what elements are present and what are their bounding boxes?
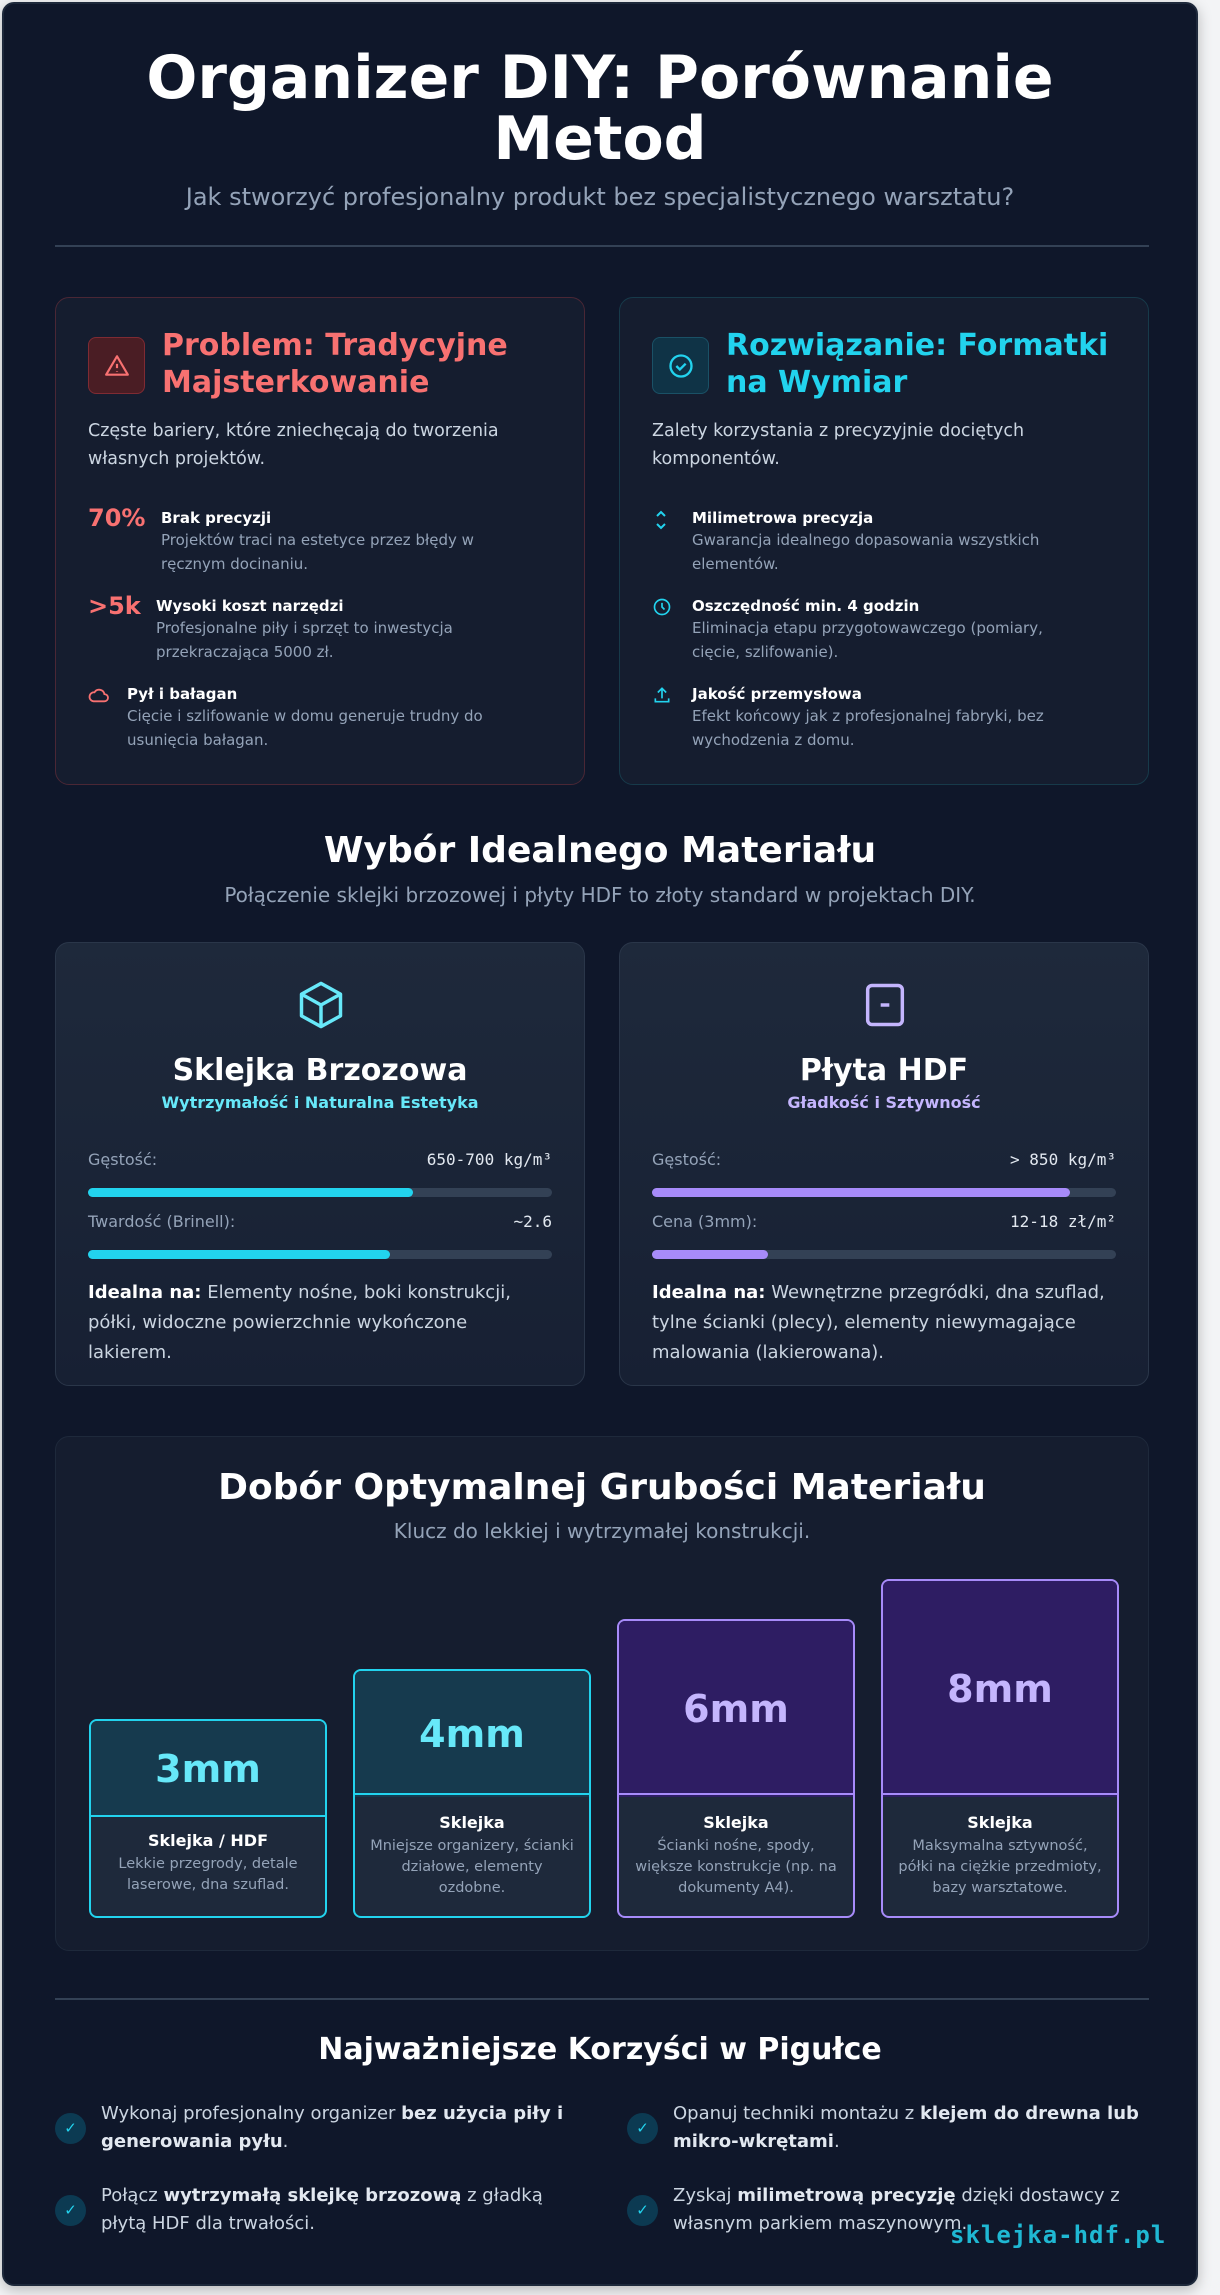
item: >5k: Wysoki koszt narzędzi (156, 597, 344, 615)
ideal use: Idealna na: Elementy nośne, boki konstrukcji, (88, 1282, 511, 1303)
box: 4mm: 4mm (419, 1712, 525, 1756)
ideal use (652, 1282, 1105, 1363)
main card: ✓ (64, 2119, 77, 2137)
icon: warning (88, 337, 145, 394)
icon: panel (866, 984, 904, 1026)
ideal use: tylne ścianki (plecy), elementy niewymagające (652, 1312, 1076, 1333)
stat: hardness: ~2.6 (513, 1212, 552, 1231)
stat: density: Gęstość: (652, 1150, 721, 1169)
stat: hardness (88, 1212, 552, 1231)
item: quality (654, 685, 1044, 749)
stat: hardness: Twardość (Brinell): (88, 1212, 235, 1231)
description: Zalety korzystania z precyzyjnie dociętych komponentów. (652, 421, 1024, 469)
section heading: materials: Wybór Idealnego Materiału (324, 830, 876, 871)
main card: ✓ (636, 2201, 649, 2219)
item: quality: Jakość przemysłowa (692, 685, 862, 703)
box: 8mm: Maksymalna sztywność, półki na ciężkie przedmioty, bazy warsztatowe. (898, 1838, 1102, 1896)
ideal use: malowania (lakierowana). (652, 1342, 884, 1363)
item: dust (88, 685, 483, 749)
stat: density (652, 1150, 1116, 1169)
box: 3mm: Sklejka / HDF (148, 1831, 268, 1850)
item: 70%: 70% (88, 504, 145, 532)
icon: check circle (652, 337, 709, 394)
item: precision: Gwarancja idealnego dopasowania wszystkich elementów. (692, 531, 1039, 573)
benefit 3: Połącz wytrzymałą sklejkę brzozową z gładką płytą HDF dla trwałości. (101, 2185, 543, 2234)
item: >5k: Profesjonalne piły i sprzęt to inwestycja przekraczająca 5000 zł. (156, 619, 453, 661)
benefit 4: Zyskaj milimetrową precyzję dzięki dostawcy z własnym parkiem maszynowym. (673, 2185, 1120, 2234)
ideal use: lakierem. (88, 1342, 172, 1363)
item: quality: Efekt końcowy jak z profesjonalnej fabryki, bez wychodzenia z domu. (692, 707, 1044, 749)
item: time (654, 597, 1043, 661)
box: 3mm: Lekkie przegrody, detale laserowe, dna szuflad. (118, 1856, 298, 1893)
panel: hdf (619, 942, 1149, 1386)
item: 70%: Projektów traci na estetyce przez błędy w ręcznym docinaniu. (161, 531, 474, 573)
box: 3mm: 3mm (155, 1747, 261, 1791)
ideal use: półki, widoczne powierzchnie wykończone (88, 1312, 467, 1333)
main card: ✓ (636, 2119, 649, 2137)
tagline: Wytrzymałość i Naturalna Estetyka (161, 1093, 478, 1112)
box: 6mm: Sklejka (703, 1813, 769, 1832)
item: dust: Cięcie i szlifowanie w domu generuje trudny do usunięcia bałagan. (127, 707, 483, 749)
stat: density: > 850 kg/m³ (1010, 1150, 1116, 1169)
box: 8mm (881, 1579, 1119, 1918)
heading: Rozwiązanie: Formatki (726, 328, 1108, 363)
panel: sklejka (55, 942, 585, 1386)
item: time: Oszczędność min. 4 godzin (692, 597, 919, 615)
item: time: Eliminacja etapu przygotowawczego (pomiary, cięcie, szlifowanie). (692, 619, 1043, 661)
heading (162, 328, 508, 400)
item: >5k (88, 592, 453, 661)
section subtitle: Połączenie sklejki brzozowej i płyty HDF to złoty standard w projektach DIY. (224, 883, 976, 907)
box: 6mm (617, 1619, 855, 1918)
item: precision (656, 509, 1039, 573)
stat: price (652, 1212, 1116, 1231)
box: 4mm: Sklejka (439, 1813, 505, 1832)
ideal use (88, 1282, 511, 1363)
heading: na Wymiar (726, 365, 907, 400)
heading: Dobór Optymalnej Grubości Materiału (218, 1467, 986, 1508)
item: precision: Milimetrowa precyzja (692, 509, 873, 527)
panel: solution (619, 297, 1149, 785)
stat: price: 12-18 zł/m² (1010, 1212, 1116, 1231)
item: 70%: Brak precyzji (161, 509, 271, 527)
tagline: Gładkość i Sztywność (787, 1093, 981, 1112)
item: dust: Pył i bałagan (127, 685, 237, 703)
heading: Majsterkowanie (162, 365, 429, 400)
item: >5k: >5k (88, 592, 141, 620)
box: 8mm: 8mm (947, 1667, 1053, 1711)
title (146, 43, 1054, 174)
panel: thickness (55, 1436, 1149, 1951)
description: Częste bariery, które zniechęcają do tworzenia własnych projektów. (88, 421, 499, 469)
title: Płyta HDF (800, 1053, 968, 1088)
benefit 1: Wykonaj profesjonalny organizer bez użycia piły i generowania pyłu. (101, 2103, 563, 2152)
box: 6mm: 6mm (683, 1687, 789, 1731)
stat: density: Gęstość: (88, 1150, 157, 1169)
box: 4mm: Mniejsze organizery, ścianki działowe, elementy ozdobne. (370, 1838, 574, 1896)
box: 3mm (89, 1719, 327, 1918)
box: 8mm: Sklejka (967, 1813, 1033, 1832)
title: Metod (493, 104, 707, 174)
subtitle: Klucz do lekkiej i wytrzymałej konstrukcji. (394, 1519, 810, 1543)
box: 4mm (353, 1669, 591, 1918)
title: Organizer DIY: Porównanie (146, 43, 1054, 113)
icon: cube (300, 982, 342, 1028)
box: 6mm: Ścianki nośne, spody, większe konstrukcje (np. na dokumenty A4). (635, 1838, 837, 1896)
footer brand: sklejka-hdf.pl (950, 2221, 1166, 2249)
title: Sklejka Brzozowa (173, 1053, 467, 1088)
item: 70% (88, 504, 474, 573)
heading: Problem: Tradycyjne (162, 328, 508, 363)
panel: problem (55, 297, 585, 785)
stat: density: 650-700 kg/m³ (427, 1150, 552, 1169)
benefit 2: Opanuj techniki montażu z klejem do drewna lub mikro-wkrętami. (673, 2103, 1139, 2152)
main card: ✓ (64, 2201, 77, 2219)
heading (726, 328, 1108, 400)
stat: price: Cena (3mm): (652, 1212, 757, 1231)
subtitle: Jak stworzyć profesjonalny produkt bez specjalistycznego warsztatu? (186, 183, 1014, 211)
stat: density (88, 1150, 552, 1169)
heading: key benefits: Najważniejsze Korzyści w Pigułce (318, 2032, 882, 2067)
ideal use: Idealna na: Wewnętrzne przegródki, dna szuflad, (652, 1282, 1105, 1303)
